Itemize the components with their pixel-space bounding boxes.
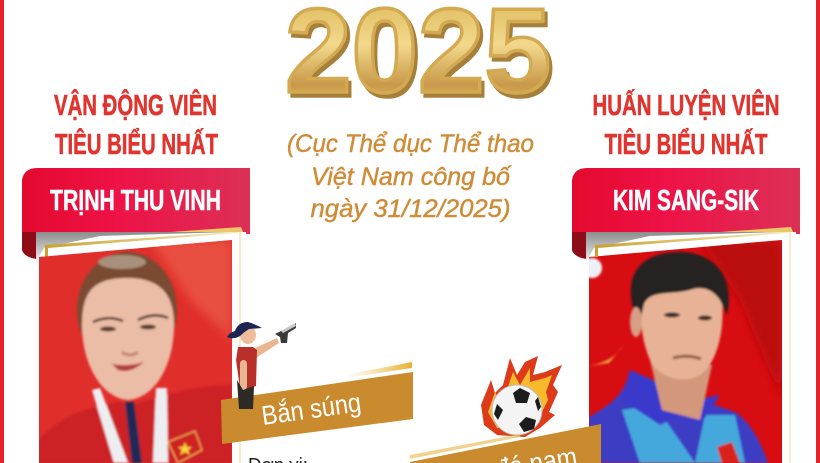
- icon: soccer ball with flames: [481, 356, 562, 437]
- name banner: coach: [572, 168, 800, 259]
- heading: athlete: VẬN ĐỘNG VIÊN: [54, 88, 217, 122]
- name banner: athlete: TRỊNH THU VINH: [50, 185, 221, 217]
- ribbon: men's football: [410, 424, 601, 463]
- source note: (Cục Thể dục Thể thao: [287, 130, 534, 158]
- name banner: athlete: [22, 168, 250, 259]
- ribbon: shooting: [221, 362, 413, 444]
- frame: coach photo: [586, 232, 791, 463]
- heading: athlete: TIÊU BIỂU NHẤT: [55, 127, 218, 161]
- source note: [287, 130, 534, 223]
- frame: athlete photo: [36, 232, 241, 463]
- ribbon: shooting: Bắn súng: [260, 386, 363, 431]
- name banner: coach: KIM SANG-SIK: [613, 185, 759, 217]
- photo: Trịnh Thu Vinh: [39, 240, 232, 463]
- heading: athlete: [54, 88, 218, 161]
- source note: Việt Nam công bố: [311, 163, 512, 191]
- heading: coach: [592, 88, 780, 161]
- icon: shooter: [227, 322, 296, 409]
- photo: Kim Sang-sik: [582, 240, 782, 463]
- source note: ngày 31/12/2025): [310, 195, 510, 223]
